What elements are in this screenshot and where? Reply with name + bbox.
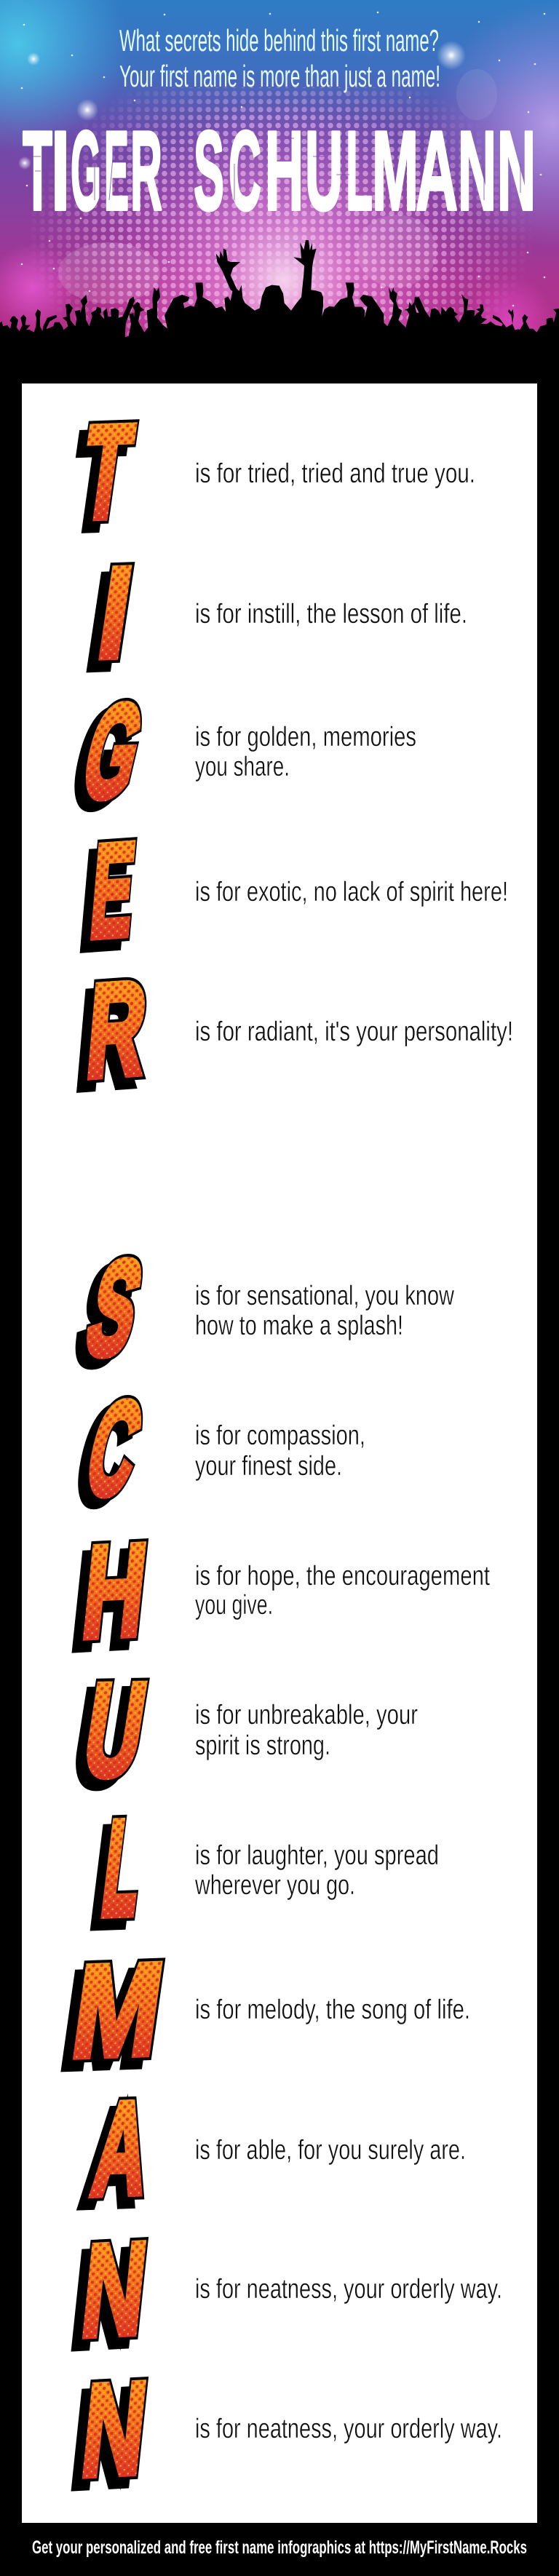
row: N	[67, 2214, 502, 2374]
letter N: N	[76, 2214, 153, 2365]
letter S: S	[66, 1241, 144, 1390]
title: TIGER SCHULMANN: I	[51, 108, 70, 234]
letter G: G	[62, 684, 146, 833]
letter L: L	[96, 1794, 148, 1942]
letter L: L	[96, 1794, 148, 1942]
row: T	[65, 398, 475, 555]
text: L lines: wherever you go.	[194, 1870, 355, 1901]
text: A line: is for able, for you surely are.	[195, 2135, 466, 2166]
letter H: H	[68, 1525, 144, 1676]
row: M	[55, 1936, 470, 2094]
letter N second: N	[67, 2364, 144, 2514]
row: I	[79, 539, 467, 696]
letter N second: N	[76, 2354, 153, 2505]
letter G: G	[71, 676, 155, 826]
row: U	[66, 1656, 418, 1812]
title: TIGER SCHULMANN: T	[23, 108, 52, 234]
row: R	[74, 954, 513, 1115]
concert backdrop	[0, 0, 559, 338]
title: TIGER SCHULMANN	[23, 108, 536, 234]
letter E: E	[86, 816, 140, 966]
letter C: C	[66, 1381, 143, 1530]
letter N second: N	[76, 2354, 153, 2505]
text: L lines: is for laughter, you spread	[195, 1840, 439, 1871]
letter I: I	[89, 539, 141, 687]
letter M: M	[55, 1945, 162, 2094]
letter I: I	[89, 539, 141, 687]
letter R: R	[82, 954, 151, 1105]
row: H	[68, 1516, 490, 1676]
letter M: M	[65, 1936, 171, 2086]
header banner	[0, 0, 559, 338]
letter C	[66, 1373, 153, 1530]
letter T: T	[74, 398, 140, 546]
text: G lines: is for golden, memories	[195, 722, 416, 752]
title: TIGER SCHULMANN: S	[194, 108, 224, 234]
letter R: R	[82, 954, 151, 1105]
letter M: M	[65, 1936, 171, 2086]
crowd silhouette	[0, 240, 559, 383]
tagline	[119, 23, 440, 93]
letter S: S	[76, 1233, 154, 1383]
letter A	[77, 2075, 156, 2232]
letter S: S	[76, 1233, 154, 1383]
letter U: U	[66, 1665, 145, 1812]
panel: acrostic	[22, 383, 537, 2523]
text: H lines	[195, 1561, 490, 1621]
letter T: T	[74, 398, 140, 546]
text: L lines	[194, 1840, 439, 1901]
row: A	[77, 2075, 466, 2232]
letter M: M	[65, 1936, 171, 2086]
letter U: U	[76, 1656, 154, 1804]
row: C	[66, 1373, 365, 1530]
text: S lines: how to make a splash!	[195, 1311, 403, 1341]
letter E: E	[86, 816, 140, 966]
letter L	[87, 1794, 148, 1951]
letter C: C	[75, 1373, 153, 1523]
letter G	[62, 676, 155, 833]
letter R: R	[82, 954, 151, 1105]
text: M line: is for melody, the song of life.	[195, 1995, 470, 2025]
letter N: N	[76, 2214, 153, 2365]
text: U lines: spirit is strong.	[195, 1730, 330, 1761]
letter C: C	[75, 1373, 153, 1523]
letter S	[66, 1233, 154, 1390]
text: U lines: is for unbreakable, your	[195, 1700, 418, 1730]
letter A: A	[86, 2075, 156, 2223]
letter U: U	[76, 1656, 154, 1804]
title: TIGER SCHULMANN: N	[458, 108, 496, 234]
title: TIGER SCHULMANN: L	[346, 108, 373, 234]
row: G	[62, 676, 416, 833]
letter E: E	[86, 816, 140, 966]
text: S lines	[195, 1281, 454, 1341]
row: N second	[67, 2354, 502, 2514]
title: TIGER SCHULMANN: E	[104, 108, 129, 234]
letter R: R	[74, 963, 143, 1115]
letter E	[77, 816, 140, 975]
text: C lines	[195, 1420, 365, 1482]
text: C lines: your finest side.	[195, 1451, 342, 1482]
title: TIGER SCHULMANN: A	[416, 108, 458, 234]
row: L	[87, 1794, 439, 1951]
text: S lines: is for sensational, you know	[195, 1281, 454, 1311]
letter U: U	[76, 1656, 154, 1804]
letter N: N	[76, 2214, 153, 2365]
title: TIGER SCHULMANN: R	[130, 108, 162, 234]
letter L: L	[87, 1803, 139, 1951]
letter T: T	[74, 398, 140, 546]
letter I: I	[79, 548, 132, 696]
letter N second: N	[76, 2354, 153, 2505]
text: T line: is for tried, tried and true you.	[195, 458, 475, 489]
text: G lines	[195, 722, 416, 782]
letter I: I	[89, 539, 141, 687]
letter H: H	[76, 1516, 153, 1666]
letter G: G	[71, 676, 155, 826]
letter H: H	[76, 1516, 153, 1666]
text: G lines: you share.	[195, 752, 290, 782]
title: TIGER SCHULMANN: U	[305, 108, 343, 234]
letter L: L	[96, 1794, 148, 1942]
title: TIGER SCHULMANN: H	[265, 108, 304, 234]
letter S: S	[76, 1233, 154, 1383]
title: TIGER SCHULMANN: M	[372, 108, 419, 234]
letter T: T	[65, 408, 130, 555]
letter A: A	[86, 2075, 156, 2223]
text: C lines: is for compassion,	[195, 1420, 365, 1451]
text: U lines	[195, 1700, 418, 1761]
text: I line: is for instill, the lesson of life.	[195, 599, 467, 629]
row: E	[77, 816, 508, 975]
letter E: E	[77, 825, 131, 975]
letter H: H	[76, 1516, 153, 1666]
title: TIGER SCHULMANN: C	[229, 108, 261, 234]
letter N: N	[67, 2224, 144, 2374]
row: S	[66, 1233, 454, 1390]
title: TIGER SCHULMANN: G	[71, 108, 101, 234]
letter C: C	[75, 1373, 153, 1523]
letter A: A	[86, 2075, 156, 2223]
letter G: G	[71, 676, 155, 826]
text: H lines: you give.	[195, 1590, 273, 1621]
letter A: A	[77, 2083, 147, 2232]
